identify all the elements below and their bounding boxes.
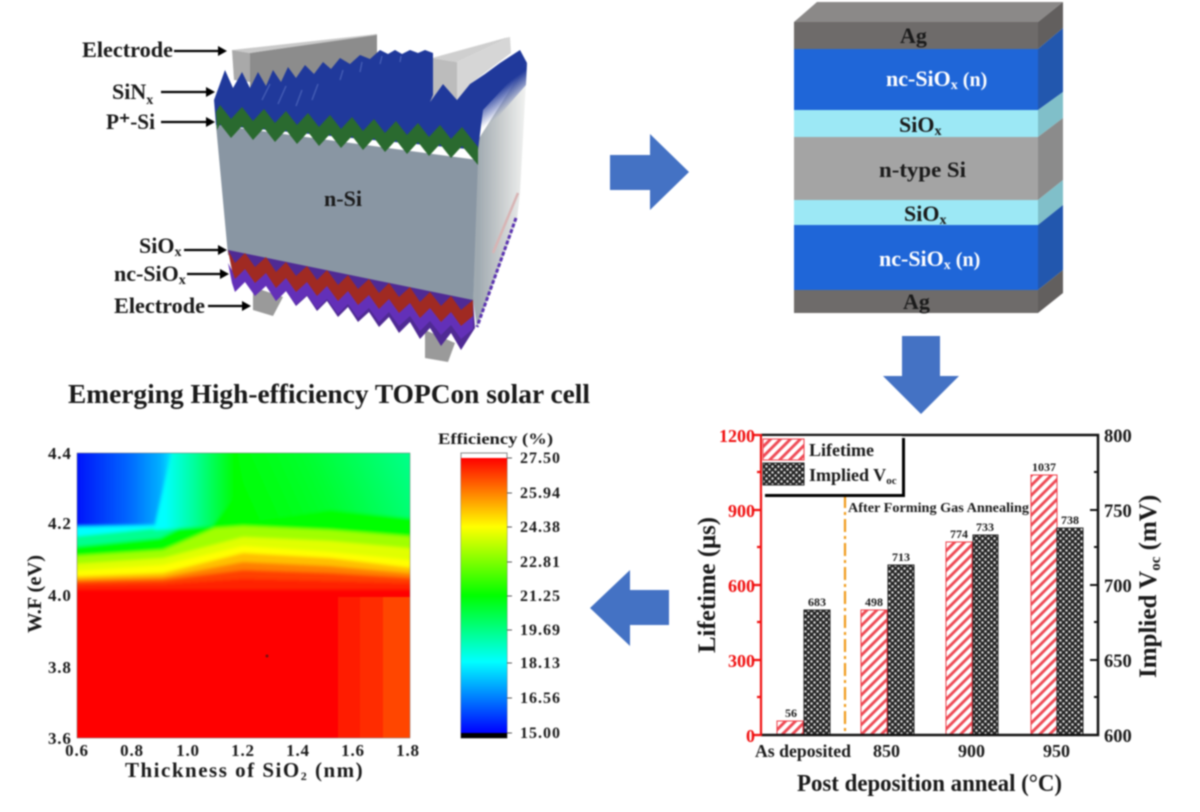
layer: P+-Si green	[216, 105, 478, 165]
layer: nc-SiOx dark purple base	[228, 250, 475, 350]
chart: right axis labels: 800	[1104, 427, 1132, 447]
chart: category labels: 950	[1043, 741, 1070, 761]
layer: side edge purple	[477, 193, 518, 327]
chart: value labels: 1037	[1032, 460, 1056, 474]
chart: right axis labels	[1104, 427, 1132, 747]
chart: value labels: 774	[950, 527, 968, 541]
label: Electrode top: Electrode	[82, 37, 173, 62]
layer: bottom electrodes	[253, 287, 455, 362]
chart: bars	[777, 475, 1083, 735]
chart: x axis title: 2	[301, 769, 308, 783]
chart: x axis labels: 1.4	[286, 741, 310, 760]
chart: y axis labels	[48, 444, 72, 748]
colorbar legend	[438, 431, 561, 742]
label: nc-SiOx: nc-SiO	[114, 261, 179, 286]
bar chart: lifetime and implied Voc	[694, 426, 1164, 797]
panel: n-Si front face	[216, 125, 478, 305]
chart: y axis labels: 4.0	[48, 586, 72, 605]
label: P+-Si	[106, 109, 215, 134]
chart: left axis labels: 600	[728, 576, 755, 596]
chart: orange divider line	[844, 495, 846, 735]
layer: nc-SiOx(n) top: (n)	[958, 69, 987, 91]
icon: top right electrode	[430, 37, 511, 102]
chart: marker dot	[266, 654, 268, 658]
chart: left axis labels: 1200	[719, 426, 755, 446]
title: Emerging High-efficiency TOPCon solar cell	[68, 379, 591, 409]
icon: top left electrode	[232, 34, 377, 90]
chart: right axis labels: 750	[1104, 502, 1132, 522]
label: n-Si: n-Si	[324, 186, 362, 211]
layer: top surface	[794, 2, 1063, 22]
layer: nc-SiOx bright purple	[228, 263, 473, 339]
chart: y axis labels: 3.8	[48, 658, 72, 677]
layer: SiNx textured blue	[214, 50, 527, 150]
label: SiOx: x	[174, 245, 181, 260]
chart: legend	[762, 436, 905, 497]
chart: x axis labels: 1.6	[341, 741, 365, 760]
layer: nc-SiOx(n) top	[794, 49, 1038, 110]
chart: x axis title: Thickness of SiO	[125, 758, 301, 782]
chart: right axis title: oc	[1148, 556, 1164, 571]
layer: side faces	[1038, 2, 1063, 313]
chart: x axis labels: 0.6	[65, 741, 89, 760]
scale labels: 16.56	[520, 690, 561, 707]
chart: x axis labels	[65, 741, 420, 760]
scale labels: 25.94	[520, 485, 561, 502]
scale labels: 19.69	[520, 622, 561, 639]
label: nc-SiOx	[114, 261, 229, 288]
chart: value labels: 738	[1061, 513, 1079, 527]
scale labels: 22.81	[520, 554, 561, 571]
label: P+-Si: P⁺-Si	[106, 109, 155, 134]
layer: SiOx bottom: x	[939, 213, 946, 228]
scale labels: 18.13	[520, 655, 561, 672]
label: Electrode bottom: Electrode	[114, 293, 205, 318]
scale ticks	[507, 458, 512, 733]
layer: blue texture streaks	[262, 56, 401, 106]
chart: x axis labels: 1.2	[231, 741, 255, 760]
chart: left axis labels	[719, 426, 755, 746]
chart: annotation: After Forming Gas Annealing	[848, 501, 1029, 516]
color scale	[461, 453, 507, 738]
layer: SiOx red	[228, 250, 473, 326]
layer: SiOx bottom: SiO	[904, 201, 939, 226]
layer: n-type Si: n-type Si	[879, 157, 966, 182]
label: SiNx: SiN	[112, 79, 146, 104]
chart: x axis title: (nm)	[308, 758, 364, 782]
heatmap: efficiency vs SiO2 thickness and work function	[24, 440, 430, 783]
label: SiNx	[112, 79, 215, 108]
chart: right axis labels: 700	[1104, 577, 1132, 597]
arrow: left	[590, 570, 669, 646]
chart: category labels: 850	[873, 741, 900, 761]
layer: blue fade on side	[481, 63, 527, 135]
chart: value labels: 733	[976, 520, 994, 534]
chart: heat field	[76, 452, 411, 739]
chart: heat frame	[77, 453, 410, 738]
arrow: down	[883, 336, 959, 414]
chart: axes and ticks	[753, 434, 1098, 736]
layer: SiOx top: SiO	[899, 112, 934, 137]
chart: value labels	[785, 460, 1079, 720]
label: SiOx	[139, 233, 227, 260]
chart: y axis title: W.F (eV)	[24, 555, 46, 633]
label: Electrode top	[82, 37, 227, 62]
panel: layer stack	[794, 2, 1063, 314]
layer: Ag bottom: Ag	[903, 289, 930, 314]
label: SiOx: SiO	[139, 233, 174, 258]
chart: y axis labels: 4.4	[48, 444, 72, 463]
chart: value labels: 56	[785, 706, 797, 720]
layer: nc-SiOx(n) bottom: nc-SiO	[879, 246, 944, 271]
layer: nc-SiOx(n) bottom	[794, 225, 1038, 290]
chart: value labels: 683	[808, 595, 826, 609]
chart: right axis labels: 600	[1104, 727, 1132, 747]
chart: left axis labels: 900	[728, 501, 755, 521]
layer: nc-SiOx(n) bottom: (n)	[951, 249, 980, 271]
chart: value labels: 713	[892, 550, 910, 564]
panel: side face of the cell	[473, 63, 527, 327]
chart: right axis labels: 650	[1104, 652, 1132, 672]
layer: nc-SiOx(n) top: x	[951, 78, 958, 93]
chart: x axis labels: 1.8	[396, 741, 420, 760]
layer: Ag top: Ag	[900, 23, 927, 48]
label: nc-SiOx: x	[179, 273, 186, 288]
chart: left axis title: Lifetime (μs)	[694, 517, 721, 653]
legend title: Efficiency (%)	[438, 431, 553, 448]
arrow: right	[610, 134, 689, 210]
chart: left axis labels: 0	[746, 726, 755, 746]
chart: x axis labels: 0.8	[120, 741, 144, 760]
layer: SiOx top: x	[934, 124, 941, 139]
chart: right axis title: (mV)	[1135, 495, 1162, 557]
label: Electrode bottom	[114, 293, 251, 318]
scale labels: 15.00	[520, 725, 561, 742]
layer: nc-SiOx(n) bottom: x	[944, 258, 951, 273]
chart: right axis title: Implied V	[1135, 571, 1162, 678]
chart: category labels: 900	[958, 741, 985, 761]
chart: y axis labels: 3.6	[48, 729, 72, 748]
chart: category labels: As deposited	[755, 741, 851, 761]
chart: category labels	[755, 741, 1070, 761]
layer: SiOx top	[794, 110, 1038, 139]
chart: x axis title: Post deposition anneal (°C)	[797, 771, 1062, 797]
chart: legend: Lifetime	[809, 440, 874, 460]
layer: n-type Si	[794, 137, 1038, 200]
chart: x axis labels: 1.0	[176, 741, 200, 760]
panel: TOPCon solar cell 3D schematic	[82, 34, 527, 362]
chart: y axis labels: 4.2	[48, 514, 72, 533]
layer: Ag bottom	[794, 289, 1038, 314]
chart: left axis labels: 300	[728, 651, 755, 671]
chart: legend: Implied V	[809, 465, 886, 485]
layer: SiOx bottom	[794, 200, 1038, 228]
scale labels: 21.25	[520, 588, 561, 605]
layer: nc-SiOx(n) top: nc-SiO	[886, 66, 951, 91]
chart: legend: oc	[886, 475, 897, 487]
chart: value labels: 498	[865, 595, 883, 609]
scale labels: 24.38	[520, 519, 561, 536]
chart: red-orange steps	[338, 597, 410, 738]
label: SiNx: x	[146, 93, 153, 108]
layer: Ag top	[794, 22, 1038, 49]
scale labels	[520, 450, 561, 742]
scale labels: 27.50	[520, 450, 561, 467]
